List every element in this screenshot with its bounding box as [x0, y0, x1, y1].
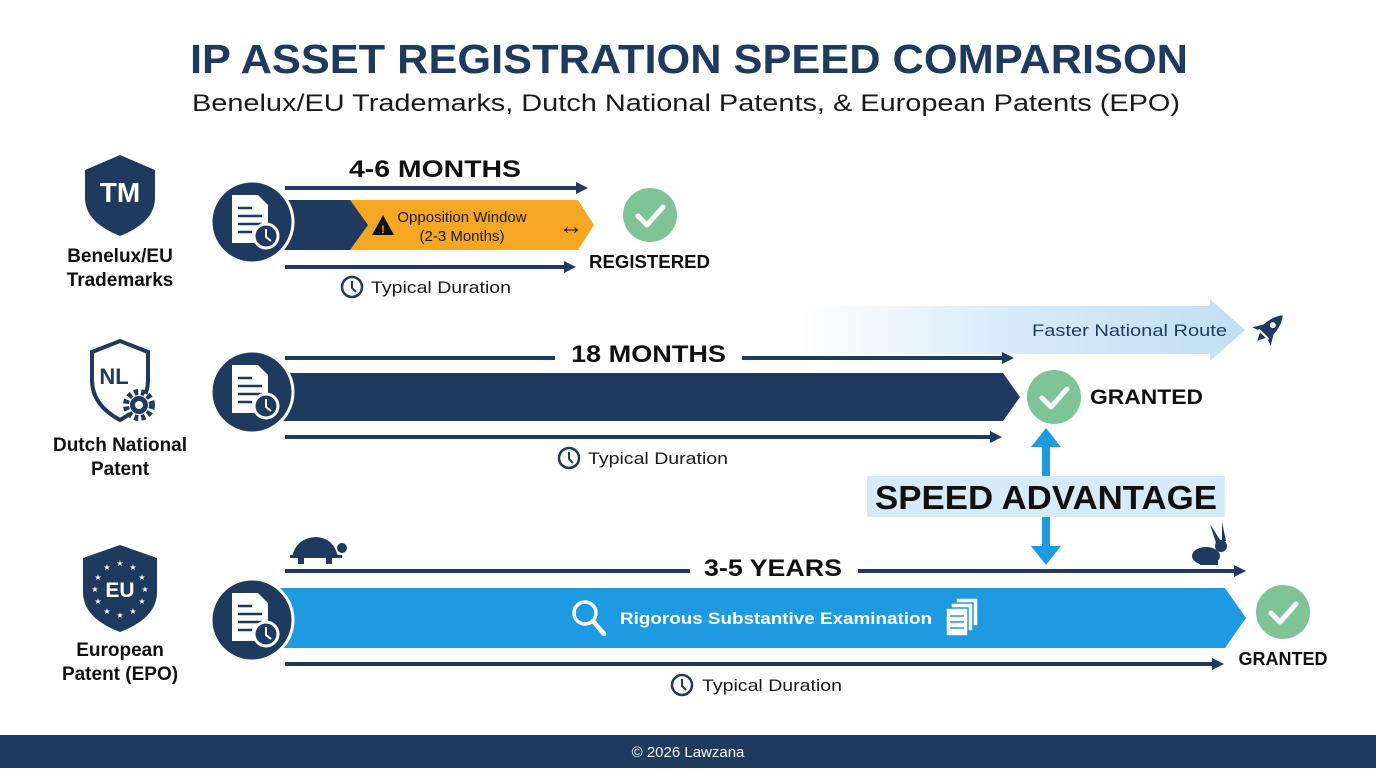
icon: EU shield: ★ — [94, 597, 102, 606]
bar: trademark timeline — [280, 200, 594, 250]
label: european: European — [76, 640, 164, 661]
typical duration: Typical Duration — [588, 449, 728, 468]
icon: warning: ! — [381, 224, 385, 236]
arrow up — [1031, 428, 1061, 478]
check granted: GRANTED — [1238, 649, 1328, 669]
icon: EU shield: ★ — [129, 607, 137, 616]
icon: EU shield: ★ — [103, 563, 111, 572]
icon: EU shield: ★ — [129, 563, 137, 572]
typical duration: Typical Duration — [702, 676, 842, 695]
typical duration — [559, 448, 728, 468]
icon: rabbit — [1192, 522, 1227, 565]
label: dutch: Patent — [91, 459, 150, 480]
icon: EU shield: ★ — [91, 585, 99, 594]
top arrow 18 months: 18 MONTHS — [571, 341, 726, 368]
label: dutch: Dutch National — [53, 435, 187, 456]
typical duration — [342, 277, 511, 297]
icon: warning — [372, 215, 394, 236]
icon: EU shield: ★ — [138, 597, 146, 606]
icon: magnifier — [574, 602, 604, 634]
icon: doc circle — [211, 181, 293, 263]
top arrow 3-5 years — [285, 555, 1246, 582]
footer — [0, 735, 1376, 768]
top arrow 4-6 months — [285, 156, 588, 194]
icon: TM shield: TM — [100, 177, 140, 208]
icon: EU shield: ★ — [141, 585, 149, 594]
icon: doc circle — [211, 579, 293, 661]
check granted — [1027, 370, 1203, 424]
speed advantage callout: SPEED ADVANTAGE — [875, 479, 1217, 516]
icon: EU shield: ★ — [116, 611, 124, 620]
icon: EU shield: ★ — [138, 573, 146, 582]
bottom arrow — [285, 431, 1002, 443]
faster national route arrow: Faster National Route — [1032, 321, 1227, 340]
row: trademarks — [67, 155, 710, 297]
label: trademarks: Trademarks — [67, 270, 173, 291]
icon: doc circle — [211, 351, 293, 433]
row: dutch patent — [53, 341, 1203, 480]
check registered: REGISTERED — [589, 252, 710, 272]
typical duration — [672, 675, 842, 695]
label: trademarks: Benelux/EU — [67, 246, 173, 267]
row: european patent — [62, 522, 1328, 695]
icon: NL shield gear: NL — [99, 364, 129, 389]
faster national route arrow — [800, 299, 1292, 361]
icon: tortoise — [290, 537, 347, 564]
footer: © 2026 Lawzana — [632, 744, 745, 761]
top arrow 4-6 months: 4-6 MONTHS — [349, 156, 521, 183]
title: IP ASSET REGISTRATION SPEED COMPARISON — [190, 36, 1188, 82]
icon: EU shield — [83, 545, 157, 632]
typical duration: Typical Duration — [371, 278, 511, 297]
top arrow 3-5 years: 3-5 YEARS — [704, 555, 842, 582]
subtitle: Benelux/EU Trademarks, Dutch National Patents, & European Patents (EPO) — [192, 90, 1180, 117]
check granted: GRANTED — [1090, 386, 1203, 409]
bar: european examination — [275, 588, 1246, 648]
bottom arrow — [285, 261, 576, 273]
icon: EU shield: ★ — [103, 607, 111, 616]
icon: EU shield: ★ — [94, 573, 102, 582]
bottom arrow — [285, 658, 1224, 670]
icon: documents — [946, 598, 978, 636]
bar: european examination: Rigorous Substantive Examination — [620, 609, 932, 628]
icon: EU shield: ★ — [116, 559, 124, 568]
bar: trademark timeline: Opposition Window — [397, 209, 527, 226]
arrow down — [1031, 516, 1061, 565]
icon: EU shield: EU — [105, 579, 135, 602]
bar: trademark timeline: ↔ — [559, 213, 583, 240]
speed advantage callout — [867, 428, 1225, 565]
check registered — [589, 188, 710, 272]
icon: rocket — [1248, 306, 1292, 350]
bar: dutch — [280, 373, 1020, 421]
top arrow 18 months — [285, 341, 1014, 368]
label: european: Patent (EPO) — [62, 664, 178, 685]
icon: TM shield — [85, 155, 155, 236]
icon: NL shield gear — [92, 341, 152, 420]
check granted — [1238, 585, 1328, 669]
bar: trademark timeline: (2-3 Months) — [419, 228, 505, 245]
